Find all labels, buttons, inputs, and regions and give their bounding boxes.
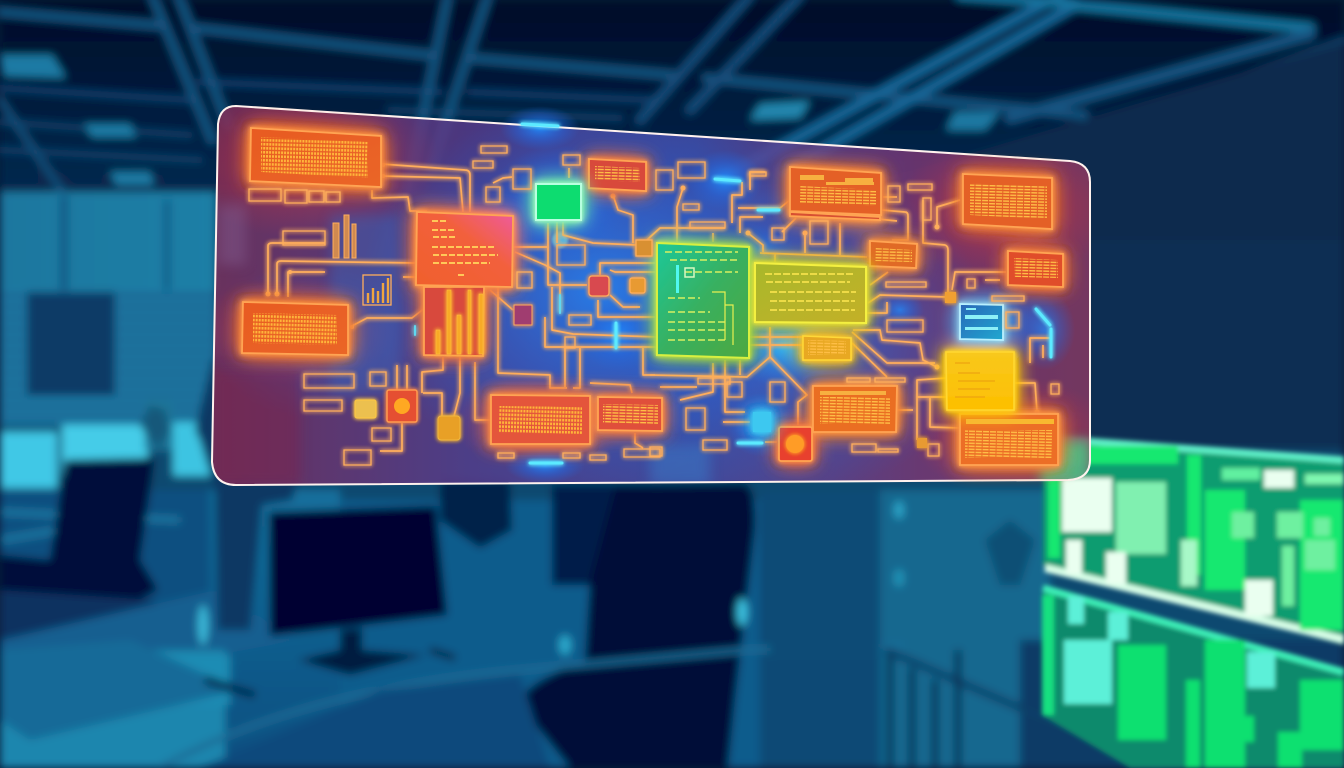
- fine text blocks: [826, 182, 874, 185]
- neon label dash: [758, 208, 779, 212]
- lower reflection screen: [1043, 586, 1344, 768]
- center wires: [380, 168, 660, 451]
- neon lower dash: [738, 442, 762, 444]
- connector wires: [266, 163, 1050, 451]
- person through panel: [212, 370, 300, 485]
- small orange box: [870, 241, 917, 268]
- curved desk edge: [160, 645, 905, 768]
- chart icon: [363, 275, 391, 305]
- windows through panel: [218, 205, 246, 265]
- box bottom right: [960, 414, 1058, 465]
- yellow nodes: [630, 278, 645, 293]
- cyan box: [960, 304, 1003, 340]
- center chair silhouette: [520, 484, 755, 768]
- box left: [242, 302, 348, 355]
- center box text: [432, 221, 498, 275]
- plant: [140, 405, 170, 448]
- node glyph: [394, 398, 410, 414]
- top small labels right: [656, 162, 932, 332]
- yellow note: [946, 352, 1014, 410]
- target icon: [514, 305, 532, 325]
- white cells: [1062, 470, 1294, 616]
- yellow note text: [955, 363, 995, 397]
- wire end dots: [266, 163, 1040, 414]
- pink node: [589, 276, 609, 296]
- panel: holographic glass: [211, 105, 1091, 486]
- bottom labels: [650, 378, 939, 456]
- box bottom small: [598, 397, 662, 431]
- plant right: [985, 520, 1035, 585]
- top labels: [283, 146, 507, 465]
- box top right B: [963, 174, 1052, 229]
- ceiling: [0, 0, 1344, 195]
- dotted text blocks: [261, 137, 368, 178]
- right small labels: [967, 279, 1059, 394]
- upper screen: [1043, 436, 1344, 645]
- small marks: [557, 155, 591, 348]
- big green box: [657, 243, 749, 358]
- railing: [885, 650, 1160, 768]
- amber node dots: [945, 292, 956, 303]
- box top right stand: [790, 212, 880, 220]
- box top-left: [250, 128, 381, 187]
- olive box text: [765, 274, 856, 310]
- green box glyph: [685, 268, 694, 277]
- yellow tag icon: [438, 416, 460, 440]
- neon soft verticals: [415, 295, 560, 335]
- green box text: [665, 252, 740, 340]
- left wires: [268, 164, 470, 327]
- floppy icons: [517, 272, 532, 288]
- panel tint: [213, 107, 1089, 484]
- bright monitors left: [0, 432, 57, 488]
- keyboard items: [430, 650, 455, 658]
- monitor: green screen: [1043, 436, 1344, 768]
- monitor stand and base: [298, 628, 425, 675]
- panel outline: [212, 106, 1090, 485]
- box lower right: [813, 386, 897, 432]
- bright green box: [536, 184, 581, 220]
- node orange with glyph: [387, 390, 417, 422]
- orange blob: [786, 435, 804, 453]
- bottom row labels under box: [498, 449, 660, 460]
- rear chair: [440, 480, 512, 548]
- column: [770, 490, 880, 660]
- right dark wall: [1000, 50, 1344, 440]
- left windows: [0, 192, 215, 292]
- neon center vertical: [614, 323, 618, 348]
- left dark monitor: [269, 506, 447, 636]
- neon bottom: [530, 462, 562, 464]
- yellow and green boxes: [536, 184, 1014, 432]
- box top small: [589, 159, 646, 191]
- olive box: [755, 263, 866, 323]
- red icon box: [779, 427, 812, 461]
- center box: [416, 212, 513, 287]
- green box cyan marker: [676, 265, 679, 293]
- yellow label icon: [355, 400, 376, 418]
- bar chart bars: [436, 290, 483, 354]
- box bottom middle: [491, 395, 590, 444]
- cyan square: [753, 412, 771, 432]
- right floor: [340, 500, 1040, 768]
- box right: [1008, 251, 1063, 287]
- lower left office: [0, 490, 340, 768]
- left chair silhouette: [0, 458, 158, 610]
- accent glows: [488, 106, 1075, 483]
- left laptop: [85, 470, 125, 490]
- blinds: [0, 290, 215, 425]
- center dark monitor back: [552, 485, 652, 585]
- dark wall screen: [27, 292, 115, 395]
- orange boxes: [242, 128, 1063, 465]
- icon square arrow: [486, 169, 531, 202]
- desk reflection: [0, 590, 300, 708]
- neon top right dash: [715, 179, 740, 181]
- green box inner wires: [712, 292, 733, 345]
- neon accents: [415, 124, 1051, 463]
- ceiling lights: [0, 55, 1000, 185]
- bar chart base: [424, 287, 484, 356]
- bright floor through panel: [650, 445, 710, 485]
- floor highlights: [737, 598, 747, 626]
- small icons and labels: [249, 146, 1059, 465]
- right wires: [650, 172, 1050, 442]
- mini boxes under top-left box: [249, 189, 340, 203]
- person silhouette: [195, 320, 302, 630]
- top bar chart: [333, 215, 356, 258]
- neon right diagonal: [1036, 309, 1051, 357]
- box contents: text textures: [253, 137, 1058, 458]
- box top right A: [790, 167, 881, 215]
- neon top edge: [522, 124, 558, 126]
- cyan box bars: [965, 308, 998, 330]
- feature icons: [355, 292, 956, 453]
- small yellow box: [803, 336, 851, 360]
- ceiling beams: [0, 0, 1344, 225]
